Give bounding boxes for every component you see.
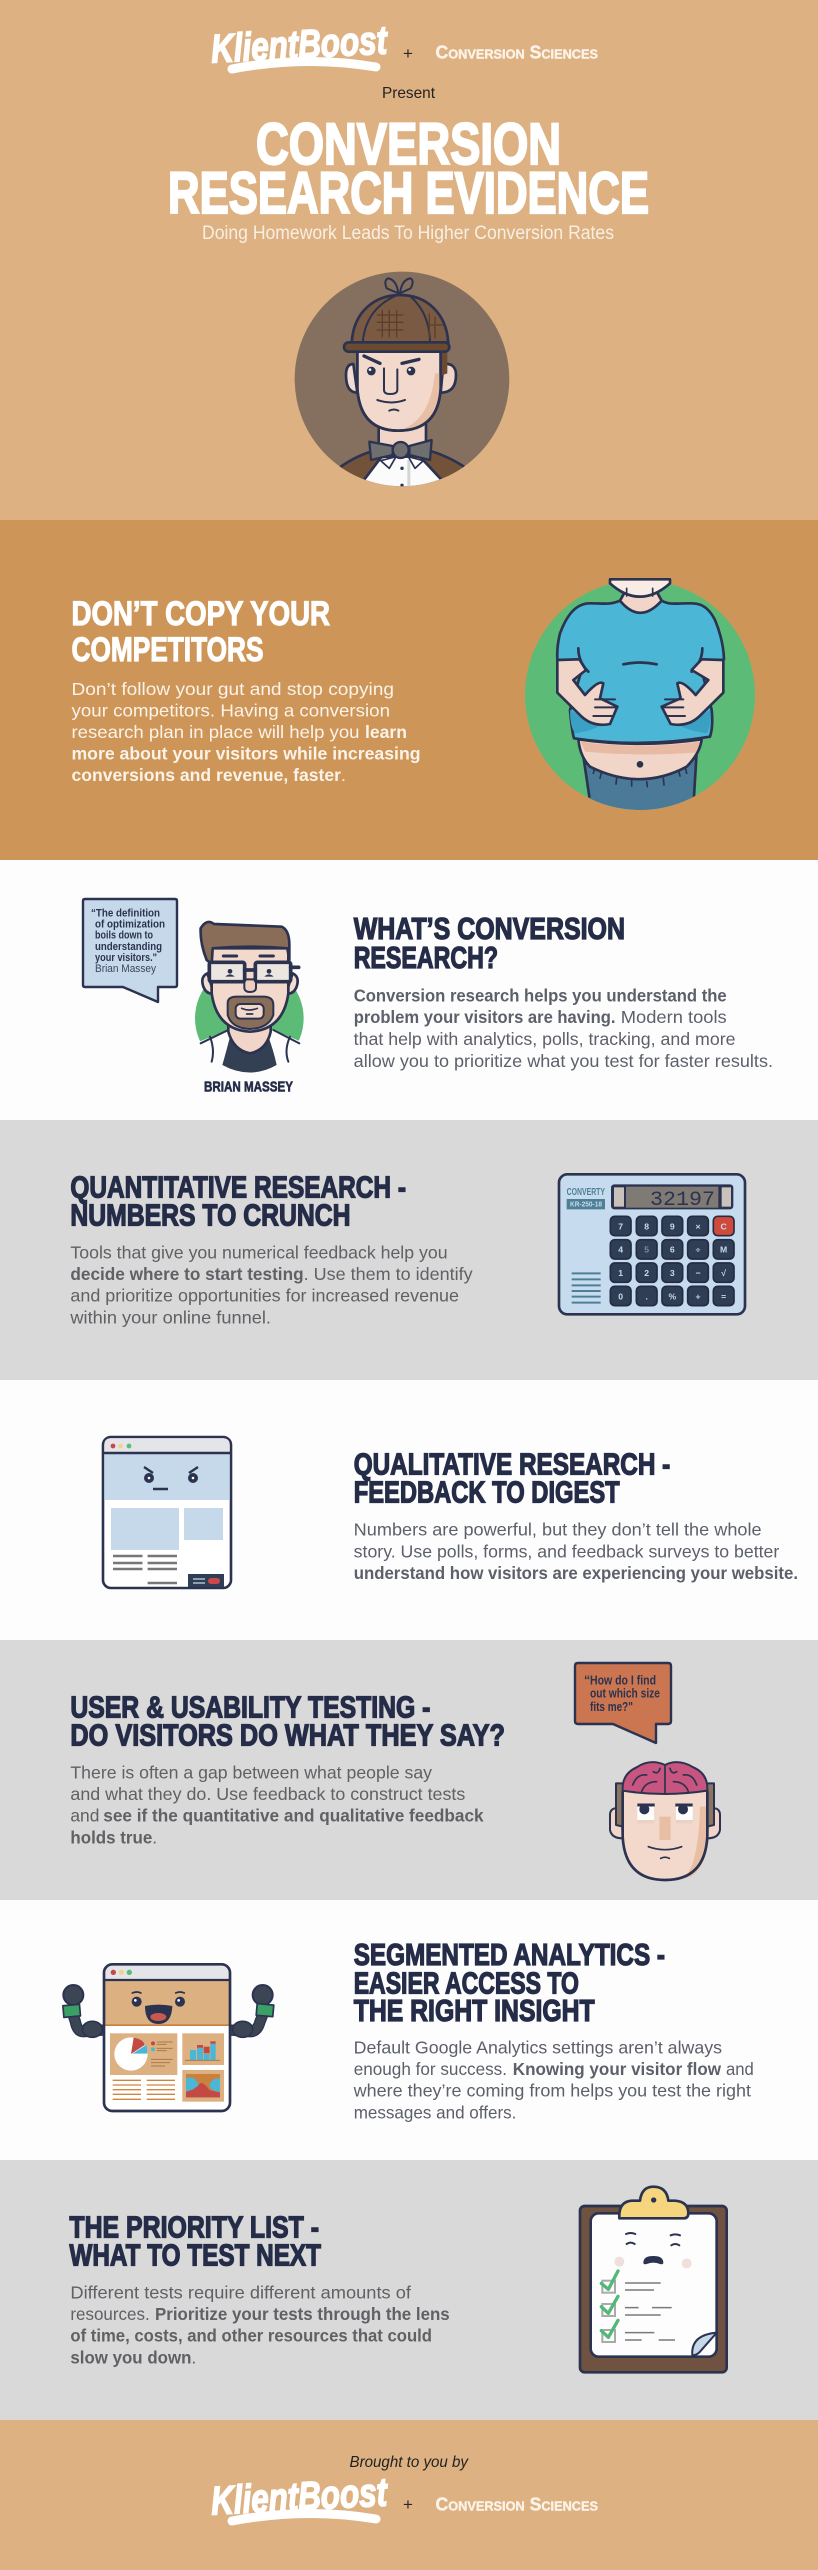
speech bubble: quote: of optimization <box>95 919 165 931</box>
icon: annoyed browser window <box>103 1437 231 1588</box>
text block: . <box>191 2347 196 2367</box>
text: brought to you by: Brought to you by <box>350 2454 469 2471</box>
heading <box>354 912 625 975</box>
text block: and what they do. Use feedback to construct tests <box>70 1784 466 1804</box>
text block <box>353 2037 754 2122</box>
text block: understand how visitors are experiencing your website. <box>354 1563 798 1583</box>
text block: Conversion research helps you understand the <box>354 986 727 1006</box>
speech bubble: quote: understanding <box>95 941 162 953</box>
text block: decide where to start testing <box>70 1264 304 1284</box>
heading: USER & USABILITY TESTING - <box>70 1690 430 1724</box>
speech bubble: question <box>575 1663 671 1743</box>
icon: calculator: . <box>645 1291 648 1301</box>
panel: qualitative research <box>0 1380 818 1640</box>
speech bubble: question: out which size <box>590 1687 660 1701</box>
icon: detective portrait <box>295 272 509 493</box>
icon: calculator: + <box>695 1291 701 1301</box>
text block <box>70 2282 450 2367</box>
text block: problem your visitors are having. <box>354 1007 616 1027</box>
text block: . <box>341 765 346 785</box>
icon: calculator: 1 <box>618 1268 623 1278</box>
heading <box>72 595 330 669</box>
text block <box>69 1242 473 1327</box>
title: RESEARCH EVIDENCE <box>168 161 649 226</box>
panel: segmented analytics <box>0 1900 818 2160</box>
text block: . Use them to identify <box>304 1264 473 1284</box>
icon: calculator: 7 <box>618 1221 623 1231</box>
panel: header <box>0 0 818 520</box>
panel: user and usability testing <box>0 1640 818 1900</box>
icon: calculator: KR-250-18 <box>570 1200 602 1209</box>
logo: Conversion Sciences: Conversion Sciences <box>436 2494 598 2514</box>
text block: Different tests require different amounts of <box>70 2282 411 2302</box>
title <box>168 112 649 226</box>
icon: head with brain <box>610 1762 720 1880</box>
text block: . <box>152 1827 157 1847</box>
text block: and <box>70 1806 99 1826</box>
speech bubble: quote: boils down to <box>95 930 153 942</box>
text block: Don’t follow your gut and stop copying <box>72 679 394 699</box>
heading: QUALITATIVE RESEARCH - <box>354 1447 670 1481</box>
icon: calculator: − <box>695 1268 701 1278</box>
icon: Brian Massey portrait <box>193 922 307 1080</box>
heading <box>69 2210 321 2273</box>
icon: calculator: 3 <box>670 1268 675 1278</box>
text block <box>354 986 773 1071</box>
text block: of time, costs, and other resources that could <box>70 2326 432 2346</box>
heading: DO VISITORS DO WHAT THEY SAY? <box>70 1719 505 1753</box>
icon: calculator: M <box>720 1245 727 1255</box>
logo: KlientBoost: KlientBoost <box>210 2470 389 2524</box>
heading: QUANTITATIVE RESEARCH - <box>70 1171 406 1205</box>
speech bubble: quote: your visitors." <box>95 952 157 964</box>
icon: calculator: 9 <box>670 1221 675 1231</box>
text block: Tools that give you numerical feedback help you <box>70 1242 448 1262</box>
panel: what's conversion research <box>0 860 818 1120</box>
heading: RESEARCH? <box>354 941 498 975</box>
text block: slow you down <box>70 2347 191 2367</box>
text block: learn <box>365 722 407 742</box>
text block: within your online funnel. <box>69 1307 271 1327</box>
icon: analytics browser robot <box>63 1964 274 2111</box>
heading: SEGMENTED ANALYTICS - <box>354 1938 665 1972</box>
heading: COMPETITORS <box>72 631 264 669</box>
icon: calculator <box>559 1174 745 1314</box>
heading <box>354 1447 670 1509</box>
icon: calculator: 2 <box>644 1268 649 1278</box>
icon: calculator: 8 <box>644 1221 649 1231</box>
icon: calculator: 4 <box>618 1245 623 1255</box>
logo: KlientBoost: KlientBoost <box>210 18 389 72</box>
label: Brian Massey: BRIAN MASSEY <box>204 1080 293 1096</box>
plus sign: + <box>403 2495 413 2514</box>
title: CONVERSION <box>256 112 561 177</box>
text block: and <box>726 2059 754 2079</box>
heading: EASIER ACCESS TO <box>354 1966 579 2000</box>
text block <box>354 1520 798 1583</box>
subtitle: Doing Homework Leads To Higher Conversion Rates <box>202 223 614 244</box>
icon: clipboard checklist <box>580 2187 727 2372</box>
text block: more about your visitors while increasing <box>72 744 420 764</box>
panel: footer <box>0 2420 818 2570</box>
panel: quantitative research <box>0 1120 818 1380</box>
text block: and prioritize opportunities for increased revenue <box>70 1286 459 1306</box>
text block: Prioritize your tests through the lens <box>155 2304 450 2324</box>
heading: FEEDBACK TO DIGEST <box>354 1475 620 1509</box>
icon: calculator: 0 <box>618 1291 623 1301</box>
text block: resources. <box>70 2304 150 2324</box>
text block: that help with analytics, polls, tracking, and more <box>354 1029 736 1049</box>
text block: enough for success. <box>354 2059 507 2079</box>
text block: Default Google Analytics settings aren’t always <box>354 2037 722 2057</box>
text block: There is often a gap between what people say <box>70 1762 432 1782</box>
heading: WHAT’S CONVERSION <box>354 912 625 946</box>
heading: THE PRIORITY LIST - <box>69 2210 319 2244</box>
icon: calculator: 32197 <box>650 1189 715 1212</box>
speech bubble: question: How do I find <box>590 1673 656 1687</box>
icon: calculator: × <box>695 1221 701 1231</box>
heading <box>70 1690 505 1753</box>
text block: story. Use polls, forms, and feedback surveys to better <box>354 1541 779 1561</box>
heading: THE RIGHT INSIGHT <box>354 1994 595 2028</box>
panel: don't copy your competitors <box>0 520 818 860</box>
text block: holds true <box>70 1827 153 1847</box>
heading: NUMBERS TO CRUNCH <box>70 1199 351 1233</box>
logo: Conversion Sciences: Conversion Sciences <box>436 42 598 62</box>
speech bubble: quote: Brian Massey <box>95 963 157 975</box>
icon: calculator: ÷ <box>696 1245 701 1255</box>
plus sign: + <box>403 44 413 63</box>
text block <box>72 679 420 785</box>
icon: calculator: 5 <box>644 1245 649 1255</box>
text block: see if the quantitative and qualitative feedback <box>103 1806 484 1826</box>
icon: man with belly <box>525 579 755 813</box>
speech bubble: question: “ <box>584 1673 590 1687</box>
panel: priority list <box>0 2160 818 2420</box>
icon: calculator: C <box>721 1221 728 1231</box>
text block: Numbers are powerful, but they don’t tell the whole <box>354 1520 762 1540</box>
text block: Modern tools <box>621 1007 727 1027</box>
heading <box>70 1171 406 1233</box>
text block: research plan in place will help you <box>72 722 360 742</box>
text block <box>70 1762 484 1847</box>
text block: Knowing your visitor flow <box>513 2059 721 2079</box>
text block: your competitors. Having a conversion <box>72 700 390 720</box>
text block: where they’re coming from helps you test the right <box>353 2081 751 2101</box>
icon: calculator: CONVERTY <box>567 1187 605 1198</box>
heading: DON’T COPY YOUR <box>72 595 330 633</box>
speech bubble: quote: “The definition <box>91 908 160 920</box>
text: present: Present <box>382 85 436 102</box>
icon: calculator: √ <box>721 1268 726 1278</box>
icon: calculator: 6 <box>670 1245 675 1255</box>
heading: WHAT TO TEST NEXT <box>69 2239 321 2273</box>
icon: calculator: % <box>668 1291 676 1301</box>
text block: messages and offers. <box>354 2102 516 2122</box>
speech bubble: quote <box>83 899 177 1002</box>
icon: calculator: = <box>721 1291 726 1301</box>
text block: allow you to prioritize what you test for faster results. <box>354 1051 773 1071</box>
speech bubble: question: fits me?" <box>590 1700 633 1714</box>
heading <box>354 1938 665 2028</box>
text block: conversions and revenue, faster <box>72 765 341 785</box>
